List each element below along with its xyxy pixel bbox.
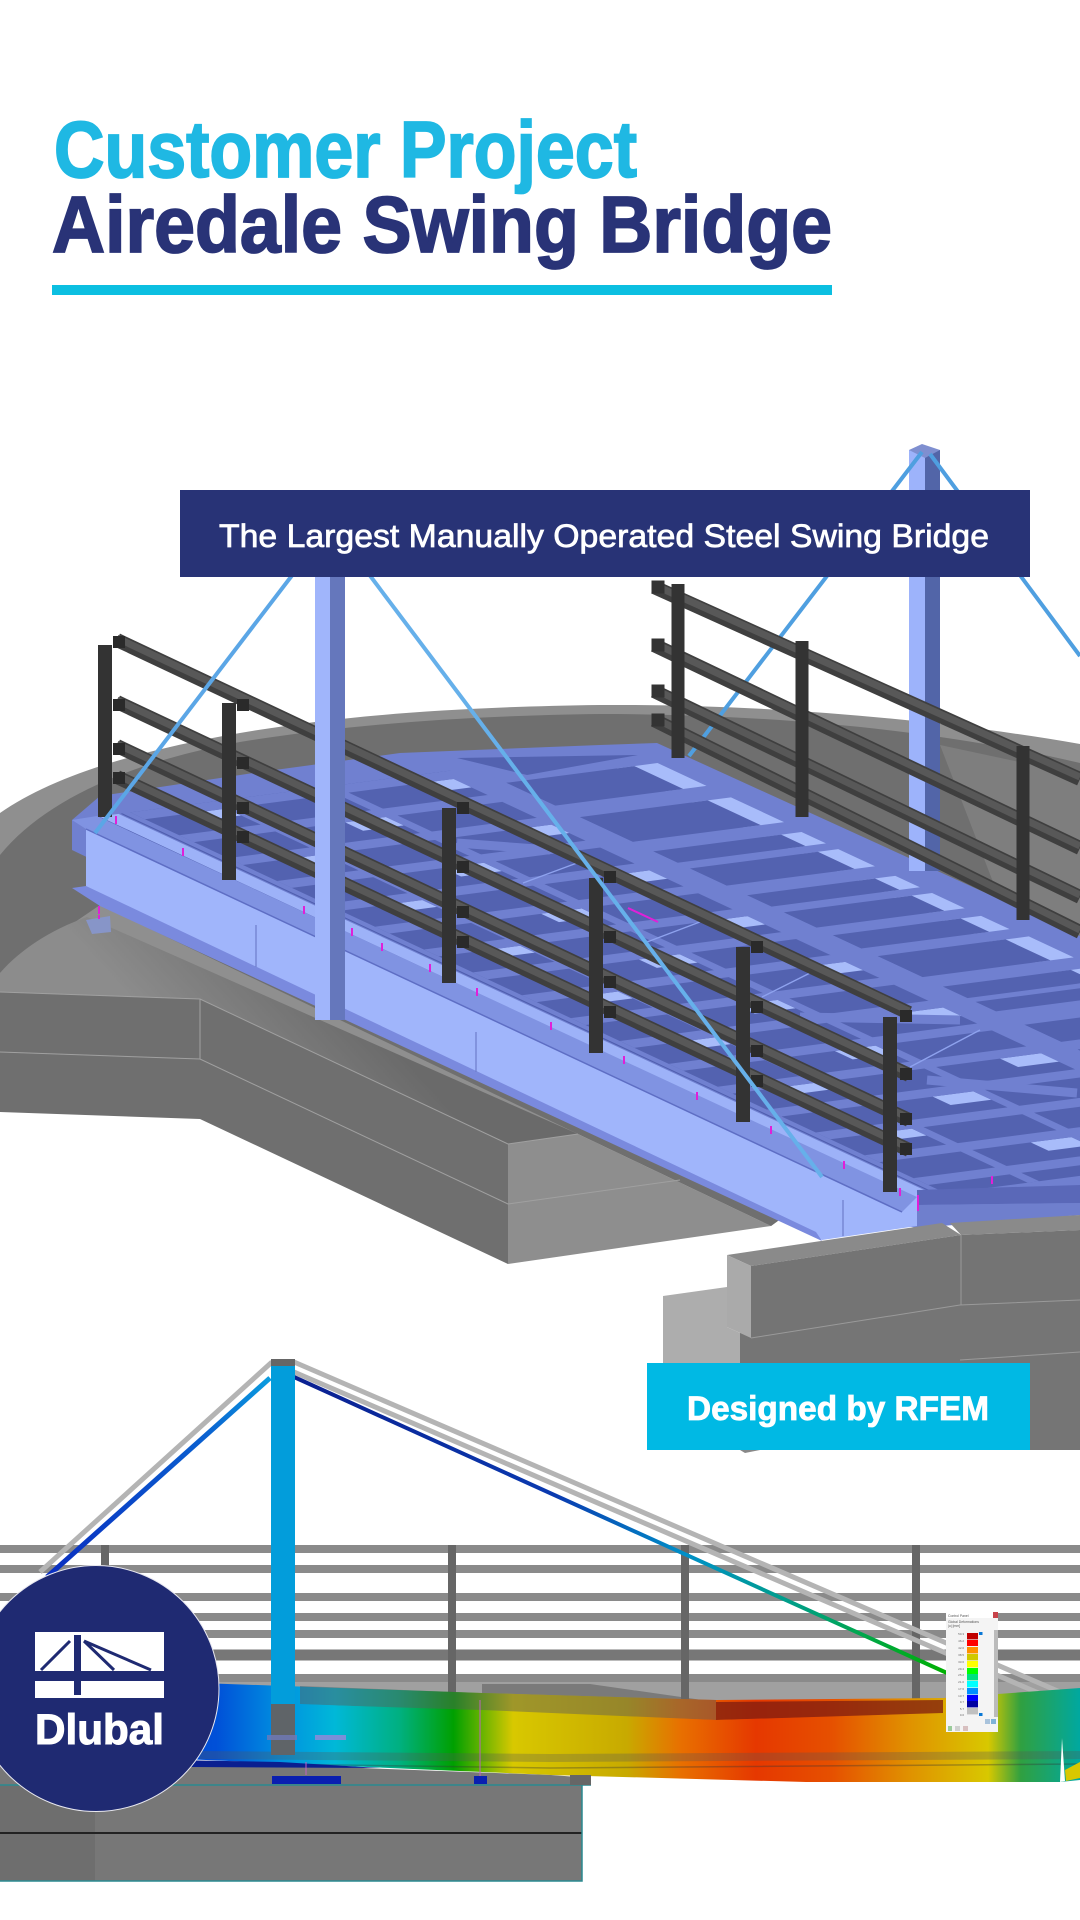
- logo wordmark: Dlubal: [35, 1706, 164, 1754]
- colour scale values: 38.5: [958, 1653, 964, 1657]
- near bridge pylon: [315, 560, 345, 1020]
- main girder: [72, 816, 917, 1241]
- girder bearing: [86, 916, 111, 934]
- colour scale values: 33.6: [958, 1660, 964, 1664]
- near pylon cables: [95, 565, 822, 1177]
- abutment: [0, 1700, 591, 1881]
- deformed cables: [294, 1377, 947, 1673]
- control panel legend: [946, 1612, 998, 1732]
- colour scale values: 50.3: [958, 1632, 964, 1636]
- colour scale values: 0.0: [960, 1713, 964, 1717]
- first back deck panel: [457, 755, 638, 775]
- title: [52, 105, 832, 295]
- near handrail: [105, 638, 909, 1192]
- FE pylon: [267, 1359, 346, 1755]
- Dlubal logo: [0, 1566, 219, 1812]
- colour scale values: 5.7: [960, 1707, 964, 1711]
- right abutment block: [663, 1215, 1080, 1453]
- magenta markers: [99, 816, 992, 1211]
- colour scale values: 9.7: [960, 1700, 964, 1704]
- grey undeformed cables: [40, 1362, 1060, 1698]
- 3D bridge model: [0, 444, 1080, 1453]
- colour scale values: 17.6: [958, 1687, 964, 1691]
- colour scale swatches: [967, 1633, 978, 1714]
- steel deck: [72, 743, 1080, 1230]
- logo mark: [35, 1632, 164, 1698]
- title line: bridge name: Airedale Swing Bridge: [52, 180, 832, 269]
- title underline: [52, 285, 832, 295]
- colour scale values: 46.2: [958, 1639, 964, 1643]
- title line: customer project: Customer Project: [54, 105, 637, 194]
- banner: largest swing bridge: The Largest Manually Operated Steel Swing Bridge: [219, 518, 989, 554]
- control panel legend: Control Panel: [948, 1614, 969, 1618]
- FE deck main beam: [160, 1700, 1080, 1782]
- bearing plates: [272, 1776, 341, 1784]
- deck panels: [78, 748, 1080, 1200]
- far handrail: [654, 584, 1080, 932]
- control panel legend: Global Deformations: [948, 1620, 979, 1624]
- control panel legend: |u| [mm]: [948, 1624, 960, 1628]
- concrete pier: [0, 705, 1080, 1264]
- deck diagonal members: [457, 843, 1077, 1093]
- far bridge pylon: [909, 444, 940, 871]
- colour scale values: [958, 1632, 964, 1717]
- handrail bars: [0, 1545, 1080, 1702]
- FE deck upper band: [200, 1683, 1080, 1722]
- far pylon cables: [689, 452, 1080, 756]
- banner: designed by RFEM: [647, 1363, 1030, 1450]
- colour scale values: 13.7: [958, 1694, 964, 1698]
- deformed cable left: [47, 1378, 270, 1577]
- banner: designed by RFEM: Designed by RFEM: [687, 1390, 989, 1428]
- colour scale values: 21.0: [958, 1680, 964, 1684]
- banner: largest swing bridge: [180, 490, 1030, 577]
- deck end beam: [917, 1185, 1080, 1205]
- colour scale values: 42.0: [958, 1646, 964, 1650]
- colour scale values: 25.2: [958, 1673, 964, 1677]
- deck bracing lines: [523, 863, 980, 1067]
- FE deformation model: [0, 1359, 1080, 1881]
- colour scale values: 29.4: [958, 1667, 964, 1671]
